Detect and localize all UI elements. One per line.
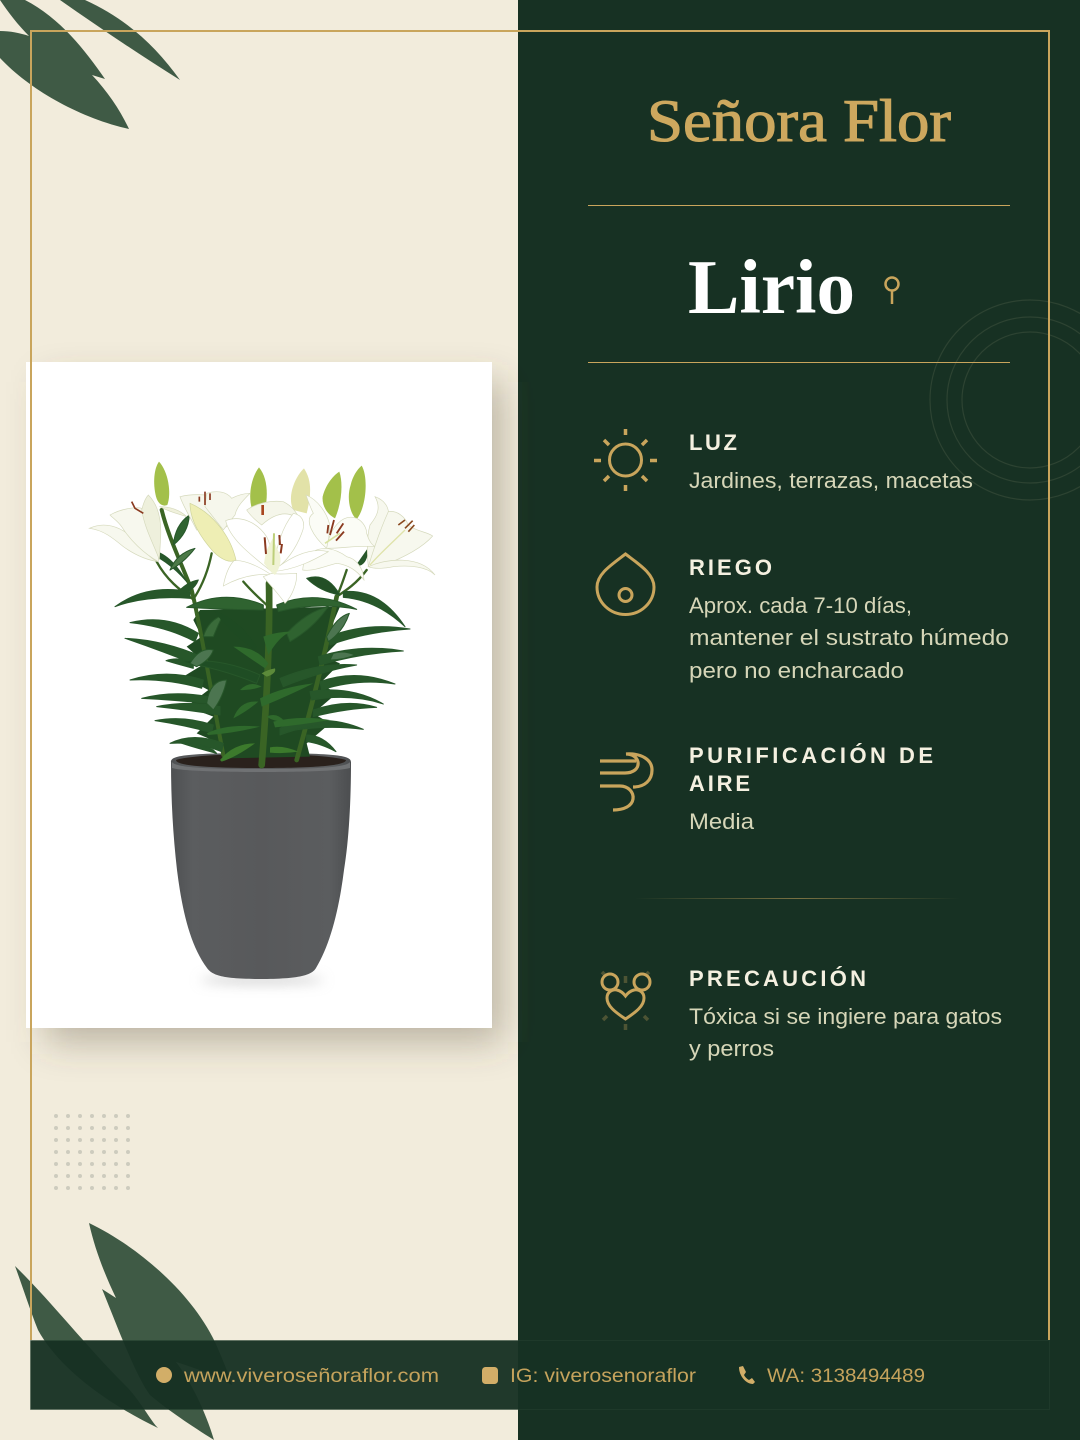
icon: phone [739,1366,755,1384]
right dark green panel [518,0,1080,1440]
dots pattern [54,1114,130,1190]
photo card: potted lily [26,362,502,1042]
pot [171,753,351,979]
text: precaucion: y perros [689,1036,774,1061]
section: purificacion de aire [600,743,933,834]
whatsapp number: WA: 3138494489 [767,1365,925,1387]
heading: luz: LUZ [689,430,737,455]
brand title: Señora Flor [647,88,951,154]
icon: wind [600,754,652,810]
text: riego: pero no encharcado [689,658,904,683]
decorative concentric circles [930,300,1080,500]
flower: right center [303,495,375,580]
pot shadow [200,976,324,984]
section: luz [594,429,973,493]
text: media: Media [689,809,754,834]
heading: riego: RIEGO [689,555,772,580]
pale bud [190,503,236,561]
text: riego: Aprox. cada 7-10 días, [689,593,912,618]
website: www.viveroseñoraflor.com [183,1365,439,1387]
flower: center [223,501,328,603]
foliage mass [183,607,343,758]
plant name: Lirio [688,244,855,330]
leaves: bottom left corner [15,1223,232,1440]
right leaves [277,548,410,752]
flower: right [367,497,435,575]
instagram handle: IG: viverosenoraflor [510,1365,697,1387]
icon: sun [594,429,657,491]
left cream background [0,0,518,1440]
section: riego [597,554,1009,683]
flower: far left [89,495,161,562]
text: riego [689,593,1009,683]
icon: heart [602,972,650,1030]
plant [89,462,435,765]
white card [26,362,492,1028]
text: precaucion [689,1004,1002,1061]
heading: purificacion de aire [689,743,933,796]
text: precaucion: Tóxica si se ingiere para gatos [689,1004,1002,1029]
icon: instagram square [482,1367,498,1384]
card shadow [46,382,502,1042]
heading: purificacion de aire: PURIFICACIÓN DE [689,743,933,768]
section: precaucion [602,966,1002,1061]
faded divider [635,898,960,899]
icon: pin symbol [886,278,898,304]
center leaves [207,610,330,762]
flower: top middle [160,492,250,561]
footer band [30,1340,1050,1410]
lower divider [588,362,1010,363]
text: riego: mantener el sustrato húmedo [689,625,1009,650]
top divider [588,205,1010,206]
stems [157,510,367,765]
text: luz: Jardines, terrazas, macetas [689,468,973,493]
left leaves [115,515,263,753]
icon: web dot [156,1367,172,1383]
leaves: top left corner [0,0,180,129]
heading: precaucion: PRECAUCIÓN [689,966,866,991]
buds [154,462,366,519]
heading: purificacion de aire: AIRE [689,771,750,796]
icon: water drop [597,554,654,614]
